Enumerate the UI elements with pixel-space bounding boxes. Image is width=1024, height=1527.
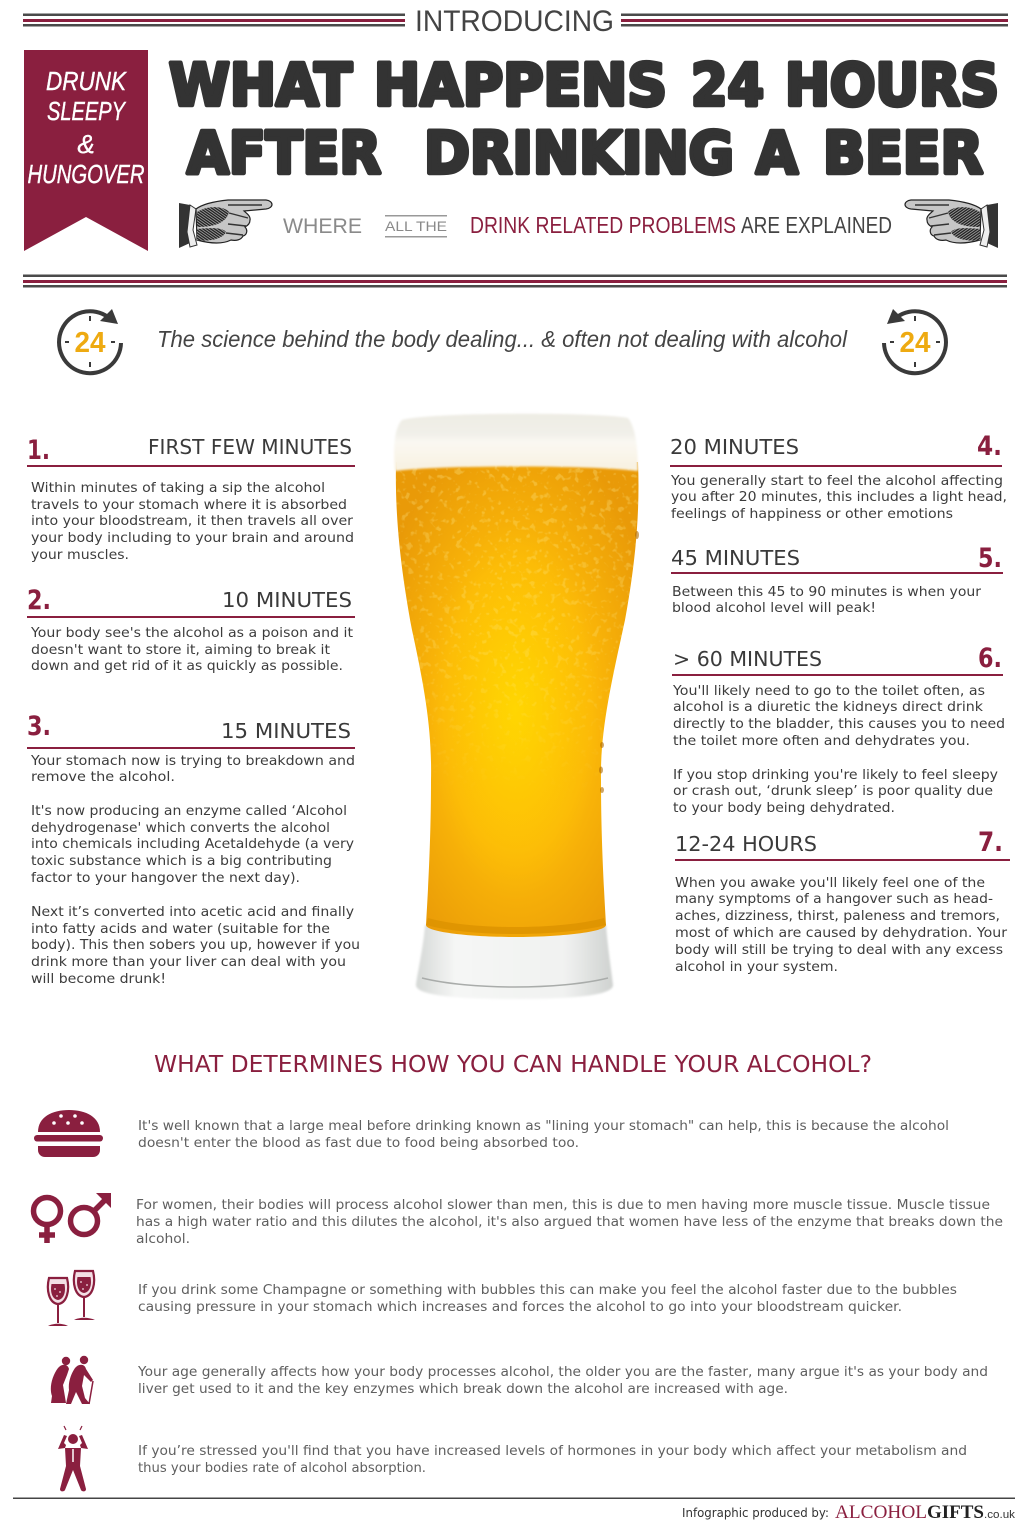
condensation on right edge bbox=[599, 531, 639, 793]
step 3: 15 MINUTES bbox=[221, 719, 351, 743]
title: WHAT bbox=[169, 51, 352, 119]
step 1: your body including to your brain and around bbox=[31, 531, 354, 546]
subtitle bbox=[283, 212, 892, 238]
step 3: into fatty acids and water (suitable for the bbox=[31, 922, 330, 937]
step 6: > 60 MINUTES bbox=[673, 647, 822, 671]
subtitle: WHERE bbox=[283, 215, 362, 238]
step 1: 1. bbox=[27, 435, 50, 466]
step 1: FIRST FEW MINUTES bbox=[148, 435, 352, 459]
step 3: toxic substance which is a big contributing bbox=[31, 854, 332, 869]
step 7: 12-24 HOURS bbox=[675, 832, 817, 856]
step 3: It's now producing an enzyme called ‘Alcohol bbox=[31, 804, 347, 819]
ribbon banner: drunk sleepy hungover: & bbox=[77, 129, 95, 159]
ribbon banner: drunk sleepy hungover bbox=[24, 50, 148, 251]
step 1: Within minutes of taking a sip the alcohol bbox=[31, 481, 325, 496]
step 6: You'll likely need to go to the toilet often, as bbox=[672, 684, 985, 699]
step 7: most of which are caused by dehydration. Your bbox=[675, 926, 1008, 941]
step 5: Between this 45 to 90 minutes is when your bbox=[672, 585, 982, 600]
step 3: into chemicals including Acetaldehyde (a very bbox=[31, 837, 354, 852]
step 6: If you stop drinking you're likely to feel sleepy bbox=[673, 768, 998, 783]
row: gender bbox=[34, 1193, 1003, 1247]
step 6: 6. bbox=[978, 643, 1002, 674]
glass base detail bbox=[422, 978, 608, 987]
row: food bbox=[34, 1110, 949, 1157]
step 5 bbox=[671, 543, 1003, 616]
step 7: When you awake you'll likely feel one of the bbox=[675, 876, 985, 891]
title: BEER bbox=[823, 119, 983, 187]
step 2: 10 MINUTES bbox=[222, 588, 352, 612]
row: gender: has a high water ratio and this dilutes the alcohol, it's also argued that women have less of the enzyme that breaks down the bbox=[136, 1215, 1003, 1230]
row: bubbles: causing pressure in your stomach which increases and forces the alcohol to go into your bloodstream quicker. bbox=[138, 1300, 902, 1315]
icon: 24 hour clock left: 24 bbox=[74, 327, 106, 359]
step 4: you after 20 minutes, this includes a light head, bbox=[671, 490, 1007, 505]
icon: champagne glasses bbox=[48, 1271, 95, 1326]
step 4: 20 MINUTES bbox=[670, 435, 799, 459]
beer body bbox=[396, 462, 638, 937]
title: HOURS bbox=[785, 51, 999, 119]
step 3: will become drunk! bbox=[31, 972, 166, 987]
icon: 24 hour clock right: 24 bbox=[900, 327, 930, 359]
footer credit: .co.uk bbox=[984, 1509, 1016, 1521]
step 3: dehydrogenase' which converts the alcohol bbox=[31, 821, 330, 836]
step 7: aches, dizziness, thirst, paleness and tremors, bbox=[675, 909, 1000, 924]
step 2: 2. bbox=[27, 585, 51, 616]
subtitle: DRINK RELATED PROBLEMS bbox=[470, 212, 736, 238]
glass base bbox=[416, 925, 613, 999]
step 3: Next it’s converted into acetic acid and finally bbox=[31, 905, 354, 920]
step 3: drink more than your liver can deal with you bbox=[31, 955, 346, 970]
foam head bbox=[394, 414, 638, 471]
ribbon banner: drunk sleepy hungover: SLEEPY bbox=[47, 96, 126, 126]
step 3: 3. bbox=[27, 711, 51, 742]
row: food: doesn't enter the blood as fast due to food being absorbed too. bbox=[138, 1136, 579, 1151]
step 7: many symptoms of a hangover such as head- bbox=[675, 892, 993, 907]
icon: gender symbols bbox=[34, 1193, 111, 1243]
footer credit: GIFTS bbox=[927, 1502, 984, 1523]
step 3: body). This then sobers you up, however if you bbox=[31, 938, 360, 953]
step 1: into your bloodstream, it then travels all over bbox=[31, 514, 354, 529]
top rule with Introducing bbox=[23, 5, 1008, 38]
title: HAPPENS bbox=[374, 51, 667, 119]
row: stress: thus your bodies rate of alcohol absorption. bbox=[138, 1461, 426, 1476]
heading: what determines: WHAT DETERMINES HOW YOU CAN HANDLE YOUR ALCOHOL? bbox=[154, 1052, 872, 1078]
subtitle: ALL THE bbox=[385, 218, 447, 234]
row: stress: If you’re stressed you'll find that you have increased levels of hormones in your body which affect your metabolism and bbox=[138, 1444, 967, 1459]
step 3: Your stomach now is trying to breakdown and bbox=[30, 754, 355, 769]
beer highlight bbox=[430, 520, 600, 900]
step 2: Your body see's the alcohol as a poison and it bbox=[30, 626, 353, 641]
step 2: down and get rid of it as quickly as possible. bbox=[31, 659, 343, 674]
step 6 bbox=[672, 643, 1005, 816]
step 7: alcohol in your system. bbox=[675, 960, 838, 975]
step 4: 4. bbox=[977, 431, 1002, 462]
subtitle: ARE EXPLAINED bbox=[741, 212, 892, 238]
top rule with Introducing: INTRODUCING bbox=[415, 5, 614, 38]
ribbon banner: drunk sleepy hungover: HUNGOVER bbox=[28, 159, 144, 189]
title: A bbox=[756, 119, 798, 187]
step 3 bbox=[27, 711, 360, 987]
step 4: feelings of happiness or other emotions bbox=[671, 507, 953, 522]
step 5: blood alcohol level will peak! bbox=[672, 601, 876, 616]
icon: stressed man bbox=[58, 1426, 88, 1491]
row: gender: alcohol. bbox=[136, 1232, 190, 1247]
tagline: The science behind the body dealing... & often not dealing with alcohol bbox=[157, 326, 848, 352]
title bbox=[169, 51, 999, 187]
row: age bbox=[51, 1356, 988, 1404]
icon: 24 hour clock right bbox=[884, 309, 946, 373]
step 6: to your body being dehydrated. bbox=[673, 801, 895, 816]
row: age: Your age generally affects how your body processes alcohol, the older you are the faster, many argue it's as your body and bbox=[137, 1365, 988, 1380]
icon: pointing hand right bbox=[905, 200, 998, 248]
footer credit bbox=[682, 1502, 1016, 1523]
step 2 bbox=[27, 585, 355, 674]
panel: left timeline steps bbox=[27, 435, 360, 987]
beer bubbles texture bbox=[396, 466, 638, 759]
step 3: factor to your hangover the next day). bbox=[31, 871, 300, 886]
row: gender: For women, their bodies will process alcohol slower than men, this is due to men having more muscle tissue. Muscle tissue bbox=[136, 1198, 990, 1213]
row: bubbles bbox=[48, 1271, 957, 1326]
step 6: alcohol is a diuretic the kidneys direct drink bbox=[673, 700, 983, 715]
step 6: directly to the bladder, this causes you to need bbox=[673, 717, 1005, 732]
step 4: You generally start to feel the alcohol affecting bbox=[670, 474, 1003, 489]
title: DRINKING bbox=[424, 119, 734, 187]
step 4 bbox=[670, 431, 1007, 522]
icon: pointing hand left bbox=[179, 200, 272, 248]
icon: 24 hour clock left bbox=[59, 309, 121, 373]
step 6: the toilet more often and dehydrates you. bbox=[673, 734, 970, 749]
step 1: travels to your stomach where it is absorbed bbox=[31, 498, 347, 513]
step 1: your muscles. bbox=[31, 548, 129, 563]
step 5: 5. bbox=[978, 543, 1002, 574]
step 2: doesn't want to store it, aiming to break it bbox=[31, 643, 330, 658]
row: stress bbox=[58, 1426, 967, 1491]
step 7: 7. bbox=[978, 827, 1003, 858]
footer credit: ALCOHOL bbox=[835, 1502, 927, 1523]
panel: right timeline steps bbox=[670, 431, 1010, 975]
step 6: or crash out, ‘drunk sleep’ is poor quality due bbox=[673, 784, 993, 799]
step 3: remove the alcohol. bbox=[31, 770, 175, 785]
row: age: liver get used to it and the key enzymes which break down the alcohol are increased with age. bbox=[138, 1382, 788, 1397]
title: AFTER bbox=[187, 119, 381, 187]
row: food: It's well known that a large meal before drinking known as "lining your stomach" can help, this is because the alcohol bbox=[138, 1119, 949, 1134]
beer glass photo illustration bbox=[390, 414, 640, 999]
title: 24 bbox=[691, 51, 764, 119]
ribbon banner: drunk sleepy hungover: DRUNK bbox=[46, 66, 127, 96]
step 7: body will still be trying to deal with any excess bbox=[675, 943, 1003, 958]
step 7 bbox=[675, 827, 1010, 975]
icon: burger bbox=[34, 1110, 103, 1157]
icon: elderly couple bbox=[51, 1356, 93, 1404]
footer credit: Infographic produced by: bbox=[682, 1505, 829, 1520]
row: bubbles: If you drink some Champagne or something with bubbles this can make you feel the alcohol faster due to the bubbles bbox=[138, 1283, 957, 1298]
step 5: 45 MINUTES bbox=[671, 546, 800, 570]
step 1 bbox=[27, 435, 355, 563]
